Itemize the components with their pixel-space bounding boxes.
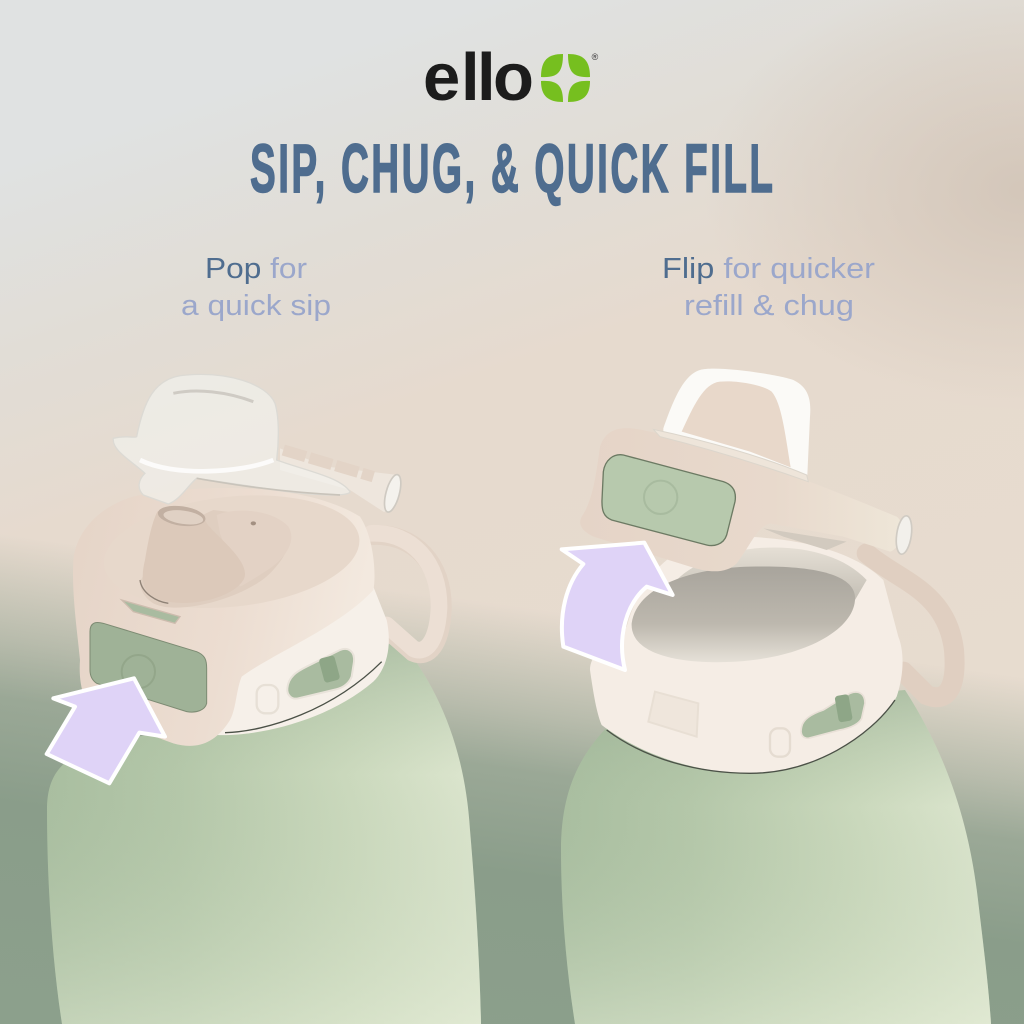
clear cap dome — [113, 374, 350, 504]
caption: pop for a quick sip: a quick sip — [181, 290, 331, 322]
vent slot — [122, 600, 180, 623]
green push button — [90, 623, 207, 712]
title: SIP, CHUG, & QUICK FILL — [250, 129, 773, 207]
arrow: flip up — [562, 543, 673, 670]
spout — [140, 503, 245, 603]
inner wall — [677, 547, 867, 600]
caption: pop for a quick sip — [181, 253, 331, 322]
right bottle body — [561, 690, 991, 1024]
logo: ello: ello — [423, 40, 534, 115]
lid recess — [98, 484, 365, 620]
hinge — [763, 528, 847, 550]
clear pull tab arm — [280, 448, 404, 514]
arrow: push — [47, 678, 165, 783]
collar — [217, 587, 389, 735]
left bottle cap — [47, 374, 442, 783]
left bottle body — [47, 640, 481, 1024]
caption: flip for quicker refill and chug — [662, 253, 875, 322]
green push button — [602, 455, 735, 546]
clear cap — [653, 369, 810, 482]
upper lid — [580, 428, 902, 571]
loop handle — [372, 533, 442, 653]
bottle opening — [632, 566, 855, 662]
caption: flip for quicker refill and chug: Flip for quicker — [662, 253, 875, 285]
logo: ello: ® — [592, 52, 599, 62]
logo: ello — [423, 40, 599, 115]
loop handle — [867, 553, 955, 697]
caption: pop for a quick sip: Pop for — [205, 253, 307, 285]
lid ring — [73, 488, 375, 746]
collar ring — [590, 537, 903, 773]
clear tab tip — [894, 515, 914, 555]
right bottle cap — [562, 369, 955, 773]
caption: flip for quicker refill and chug: refill & chug — [684, 290, 854, 322]
